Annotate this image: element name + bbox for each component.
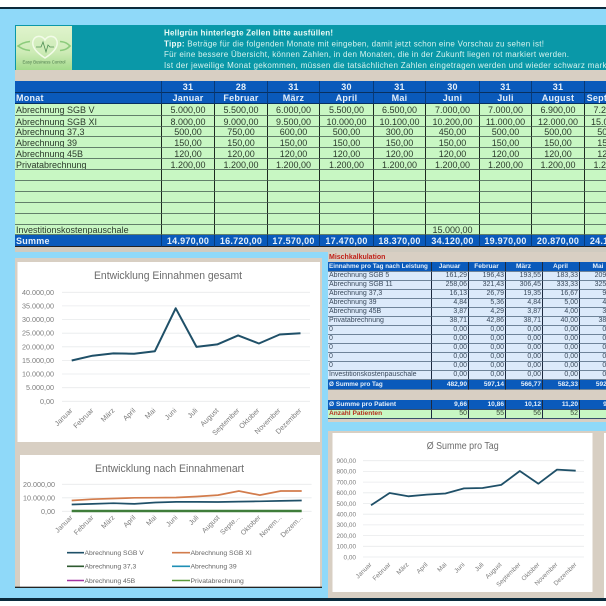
table: Einnahme pro Tag: 566,77: [521, 381, 541, 388]
chart: Summe pro Tag: März: [395, 561, 410, 576]
table: Einnahme pro Tag: 321,43: [483, 281, 504, 288]
main revenue table: 10.200,00: [432, 117, 473, 127]
main revenue table: 10.100,00: [379, 117, 420, 127]
main revenue table: Privatabrechnung: [16, 160, 87, 170]
table: Einnahme pro Tag: April: [553, 263, 568, 270]
chart: Entwicklung Einnahmen gesamt: [15, 258, 322, 450]
main revenue table: 20.870,00: [537, 236, 579, 246]
chart: Entwicklung nach Einnahmenart: 20.000,00: [23, 480, 55, 489]
chart: Entwicklung Einnahmen gesamt: 5.000,00: [26, 383, 54, 392]
table: Einnahme pro Tag: 0,00: [490, 326, 504, 333]
main revenue table: 120,00: [439, 149, 466, 159]
table: Einnahme pro Tag: Mai: [592, 263, 604, 270]
table: Einnahme pro Tag: 0: [329, 326, 333, 333]
main revenue table: 120,00: [174, 149, 202, 159]
chart: Summe pro Tag: 200,00: [336, 533, 356, 540]
table: Summe pro Patient und Anzahl Patienten: Anzahl Patienten: [329, 410, 382, 417]
chart: Summe pro Tag: August: [484, 561, 504, 580]
table: Einnahme pro Tag: 4,84: [453, 299, 467, 306]
table: Summe pro Patient und Anzahl Patienten: [328, 400, 606, 419]
table: Einnahme pro Tag: 306,45: [520, 281, 541, 288]
table: Einnahme pro Tag: März: [516, 263, 531, 270]
chart: Summe pro Tag: Juni: [453, 561, 466, 575]
chart: Entwicklung Einnahmen gesamt: Januar: [53, 406, 75, 428]
chart: Entwicklung nach Einnahmenart: Entwicklung nach Einnahmenart: [95, 463, 244, 475]
chart: Entwicklung nach Einnahmenart: 10.000,00: [23, 493, 55, 502]
main revenue table: 17.470,00: [325, 236, 368, 246]
main revenue table: 14.970,00: [167, 236, 209, 246]
table: Einnahme pro Tag: 0,00: [564, 353, 578, 360]
main revenue table: Abrechnung 39: [16, 138, 77, 148]
main revenue table: 17.570,00: [272, 236, 315, 246]
chart: Summe pro Tag: 0,00: [344, 554, 356, 561]
chart: Entwicklung nach Einnahmenart: Novem...: [259, 514, 283, 539]
table: Einnahme pro Tag: 0,00: [527, 326, 541, 333]
main revenue table: 1.200,00: [435, 160, 470, 170]
table: Einnahme pro Tag: 597,14: [484, 381, 504, 388]
table: Einnahme pro Tag: 0,00: [564, 371, 578, 378]
chart: Entwicklung Einnahmen gesamt: März: [99, 406, 117, 424]
main revenue table: 150,00: [544, 138, 572, 148]
chart: Summe pro Tag: November: [534, 561, 560, 587]
chart: Entwicklung Einnahmen gesamt: 20.000,00: [22, 342, 54, 351]
main revenue table: 150,00: [439, 138, 466, 148]
table: Einnahme pro Tag: 4,29: [490, 308, 504, 315]
main revenue table: 500,00: [333, 127, 360, 137]
chart: Summe pro Tag: April: [415, 561, 429, 575]
table: Einnahme pro Tag: Abrechnung 37,3: [329, 290, 382, 297]
chart: Entwicklung Einnahmen gesamt: Mai: [143, 406, 158, 421]
main revenue table: 7.000,00: [488, 105, 523, 115]
main revenue table: 150,00: [280, 138, 307, 148]
panel: Mischkalkulation background: [328, 252, 606, 422]
chart: Entwicklung Einnahmen gesamt: November: [253, 406, 283, 436]
chart: Entwicklung nach Einnahmenart: Februar: [73, 514, 96, 537]
main revenue table: 6.900,00: [540, 105, 576, 115]
chart legend: [67, 550, 252, 585]
main revenue table: [15, 81, 606, 247]
table: Einnahme pro Tag: Ø Summe pro Tag: [329, 381, 383, 388]
table: Einnahme pro Tag: 0,00: [453, 326, 467, 333]
main revenue table: 1.200,00: [540, 160, 576, 170]
table: Einnahme pro Tag: 0,00: [564, 335, 578, 342]
table: Einnahme pro Tag: 16,13: [449, 290, 467, 297]
table: Einnahme pro Tag: Abrechnung SGB 5: [329, 272, 389, 279]
main revenue table: 6.500,00: [382, 105, 417, 115]
main revenue table: 1.200,00: [223, 160, 259, 170]
main revenue table: 5.000,00: [170, 105, 206, 115]
table: Einnahme pro Tag: 0,00: [564, 326, 578, 333]
main revenue table: 500,00: [174, 127, 202, 137]
chart: Entwicklung Einnahmen gesamt: August: [198, 406, 220, 428]
chart: Summe pro Tag: [328, 431, 606, 598]
chart: Entwicklung nach Einnahmenart: Januar: [54, 514, 75, 535]
main revenue table: 8.000,00: [170, 117, 206, 127]
main revenue table: 31: [183, 82, 193, 92]
main revenue table: Abrechnung SGB V: [16, 105, 95, 115]
chart: Entwicklung Einnahmen gesamt: 35.000,00: [22, 301, 54, 310]
main revenue table: 28: [236, 82, 246, 92]
table: Summe pro Patient und Anzahl Patienten: 11,20: [562, 401, 578, 408]
chart legend: Abrechnung 45B: [84, 578, 136, 585]
main revenue table: 120,00: [333, 149, 360, 159]
table: Einnahme pro Tag: 3,87: [453, 308, 467, 315]
instruction text: [164, 28, 606, 70]
main revenue table: 120,00: [227, 149, 255, 159]
logo: [16, 26, 72, 70]
main revenue table: Abrechnung SGB XI: [16, 117, 97, 127]
table: Einnahme pro Tag: Privatabrechnung: [329, 317, 384, 324]
table: Einnahme pro Tag: 0: [329, 362, 333, 369]
table: Einnahme pro Tag: 0,00: [490, 344, 504, 351]
table: Einnahme pro Tag: Investitionskostenpauschale: [329, 371, 417, 378]
beige band under banner: [15, 70, 606, 81]
chart: Entwicklung Einnahmen gesamt: 10.000,00: [22, 370, 54, 378]
table: Einnahme pro Tag: 482,90: [447, 381, 467, 388]
chart legend: Abrechnung SGB XI: [190, 550, 252, 557]
chart: Entwicklung nach Einnahmenart: August: [201, 514, 221, 535]
table: Einnahme pro Tag: Einnahme pro Tag nach Leistung: [329, 263, 428, 270]
chart: Entwicklung nach Einnahmenart: 0,00: [41, 507, 55, 516]
main revenue table: 19.970,00: [484, 236, 527, 246]
main revenue table: 150,00: [227, 138, 255, 148]
table: Einnahme pro Tag: 0,00: [564, 362, 578, 369]
chart: Summe pro Tag: Oktober: [520, 561, 542, 582]
table: Einnahme pro Tag: 0,00: [453, 344, 467, 351]
main revenue table: 15.000,00: [432, 225, 473, 235]
table: Einnahme pro Tag: 161,29: [446, 272, 467, 279]
table: Einnahme pro Tag: Abrechnung 45B: [329, 308, 381, 315]
chart: Summe pro Tag: Februar: [372, 561, 393, 582]
table: Einnahme pro Tag: 42,86: [486, 317, 504, 324]
table: Einnahme pro Tag: 5,36: [490, 299, 504, 306]
chart: Summe pro Tag: 900,00: [336, 458, 356, 465]
chart: Entwicklung Einnahmen gesamt: Entwicklung Einnahmen gesamt: [94, 270, 242, 282]
main revenue table: Abrechnung 37,3: [16, 127, 85, 137]
chart: Summe pro Tag: 500,00: [336, 501, 356, 508]
main revenue table: 6.000,00: [276, 105, 311, 115]
main revenue table: 9.000,00: [223, 117, 259, 127]
chart legend: Abrechnung 37,3: [84, 564, 136, 571]
table: Einnahme pro Tag: 258,06: [446, 281, 467, 288]
table: Einnahme pro Tag: 0,00: [490, 362, 504, 369]
table: Einnahme pro Tag: 19,35: [523, 290, 541, 297]
table: Einnahme pro Tag: 4,84: [527, 299, 541, 306]
main revenue table: 16.720,00: [220, 236, 262, 246]
main revenue table: Investitionskostenpauschale: [16, 225, 129, 235]
table: Einnahme pro Tag: 0,00: [527, 362, 541, 369]
main revenue table: 12.000,00: [538, 117, 578, 127]
table: Einnahme pro Tag: [328, 262, 606, 390]
instruction text: Hellgrün hinterlegte Zellen bitte ausfüllen!: [164, 28, 333, 38]
chart legend: Abrechnung 39: [190, 564, 237, 571]
logo: Easy Business Control: [22, 60, 66, 64]
chart: Entwicklung nach Einnahmenart: Juli: [188, 514, 201, 527]
chart: Entwicklung Einnahmen gesamt: September: [210, 406, 242, 437]
main revenue table: 120,00: [492, 149, 519, 159]
main revenue table: 9.500,00: [276, 117, 311, 127]
main revenue table: 120,00: [280, 149, 307, 159]
main revenue table: Summe: [16, 236, 50, 246]
table: Einnahme pro Tag: 0,00: [527, 344, 541, 351]
table: Einnahme pro Tag: 40,00: [560, 317, 578, 324]
table: Einnahme pro Tag: 0,00: [453, 335, 467, 342]
table: Einnahme pro Tag: 3,87: [527, 308, 541, 315]
table: Summe pro Patient und Anzahl Patienten: 50: [459, 410, 467, 417]
main revenue table: 5.500,00: [329, 105, 364, 115]
chart: Entwicklung Einnahmen gesamt: 0,00: [40, 397, 54, 406]
chart: Entwicklung Einnahmen gesamt: Oktober: [237, 406, 262, 431]
table: Summe pro Patient und Anzahl Patienten: 9,66: [454, 401, 467, 408]
chart: Entwicklung nach Einnahmenart: Septe...: [219, 514, 241, 536]
chart: Entwicklung nach Einnahmenart: Dezem...: [280, 514, 304, 539]
table: Einnahme pro Tag: 0,00: [453, 371, 467, 378]
table: Einnahme pro Tag: 0: [329, 344, 333, 351]
table: Summe pro Patient und Anzahl Patienten: 52: [570, 410, 578, 417]
chart: Entwicklung nach Einnahmenart: März: [100, 514, 117, 530]
table: Einnahme pro Tag: Januar: [439, 263, 460, 270]
main revenue table: 150,00: [492, 138, 519, 148]
chart: Entwicklung nach Einnahmenart: Oktober: [240, 514, 263, 537]
chart: Entwicklung Einnahmen gesamt: 15.000,00: [22, 356, 54, 365]
table: Einnahme pro Tag: 5,00: [564, 299, 578, 306]
table: Summe pro Patient und Anzahl Patienten: 55: [496, 410, 504, 417]
main revenue table: Juni: [443, 93, 462, 103]
chart: Summe pro Tag: 600,00: [336, 490, 356, 497]
chart: Summe pro Tag: Ø Summe pro Tag: [427, 441, 499, 452]
table: Einnahme pro Tag: 4,00: [564, 308, 578, 315]
table: Einnahme pro Tag: Februar: [474, 263, 499, 270]
main revenue table: 150,00: [386, 138, 413, 148]
main revenue table: 750,00: [227, 127, 255, 137]
chart: Summe pro Tag: Januar: [355, 561, 374, 580]
chart: Summe pro Tag: 100,00: [336, 544, 356, 551]
bottom dark rule: [0, 598, 606, 601]
beige band under table: [15, 247, 606, 252]
main revenue table: 300,00: [386, 127, 413, 137]
table: Einnahme pro Tag: 0,00: [527, 371, 541, 378]
chart legend: Privatabrechnung: [190, 578, 244, 585]
main revenue table: 1.200,00: [382, 160, 417, 170]
Mischkalkulation heading: Mischkalkulation: [329, 254, 385, 261]
table: Einnahme pro Tag: 38,71: [449, 317, 467, 324]
main revenue table: Januar: [172, 93, 204, 103]
chart: Entwicklung nach Einnahmenart: April: [123, 514, 138, 529]
main revenue table: 11.000,00: [486, 117, 525, 127]
main revenue table: April: [336, 93, 357, 103]
main revenue table: März: [283, 93, 304, 103]
chart: Summe pro Tag: 800,00: [336, 469, 356, 476]
main revenue table: 31: [288, 82, 299, 92]
table: Einnahme pro Tag: 333,33: [557, 281, 578, 288]
chart: Summe pro Tag: Dezember: [553, 561, 579, 587]
chart: Summe pro Tag: Juli: [474, 561, 485, 573]
main revenue table: 1.200,00: [170, 160, 206, 170]
chart: Entwicklung Einnahmen gesamt: April: [121, 406, 138, 423]
main revenue table: 150,00: [174, 138, 202, 148]
chart: Entwicklung Einnahmen gesamt: 40.000,00: [22, 288, 54, 297]
main revenue table: August: [542, 93, 574, 103]
main revenue table: 31: [500, 82, 511, 92]
chart: Entwicklung nach Einnahmenart: Mai: [145, 514, 159, 527]
main revenue table: Februar: [223, 93, 259, 103]
main revenue table: 120,00: [544, 149, 572, 159]
instruction text: Für eine bessere Übersicht, können Zahlen, in den Monaten, die in der Zukunft liegen rot markiert werden.: [164, 50, 569, 59]
main revenue table: 7.000,00: [435, 105, 470, 115]
main revenue table: 30: [447, 82, 458, 92]
main revenue table: 5.500,00: [223, 105, 259, 115]
chart: Summe pro Tag: 700,00: [336, 479, 356, 486]
main revenue table: Monat: [16, 93, 44, 103]
main revenue table: 150,00: [333, 138, 360, 148]
table: Einnahme pro Tag: 0,00: [453, 353, 467, 360]
table: Einnahme pro Tag: 582,33: [558, 381, 578, 388]
table: Einnahme pro Tag: 0,00: [490, 353, 504, 360]
main revenue table: 600,00: [280, 127, 307, 137]
chart: Entwicklung nach Einnahmenart: Juni: [165, 514, 180, 528]
table: Summe pro Patient und Anzahl Patienten: 56: [533, 410, 541, 417]
table: Einnahme pro Tag: 0,00: [564, 344, 578, 351]
chart: Summe pro Tag: September: [495, 561, 523, 589]
table: Einnahme pro Tag: 0,00: [490, 371, 504, 378]
main revenue table: 31: [394, 82, 405, 92]
table: Einnahme pro Tag: 0,00: [453, 362, 467, 369]
chart: Summe pro Tag: 400,00: [336, 512, 356, 518]
table: Einnahme pro Tag: 26,79: [486, 290, 504, 297]
main revenue table: 18.370,00: [378, 236, 421, 246]
chart: Entwicklung Einnahmen gesamt: Dezember: [274, 406, 304, 436]
table: Einnahme pro Tag: 0,00: [527, 353, 541, 360]
chart: Entwicklung Einnahmen gesamt: 25.000,00: [22, 329, 54, 338]
table: Summe pro Patient und Anzahl Patienten: 10,86: [487, 401, 504, 408]
main revenue table: Abrechnung 45B: [16, 149, 83, 159]
main revenue table: 1.200,00: [329, 160, 364, 170]
main revenue table: 1.200,00: [488, 160, 523, 170]
chart: Entwicklung Einnahmen gesamt: Juli: [185, 406, 200, 420]
table: Einnahme pro Tag: Abrechnung SGB 11: [329, 281, 393, 288]
table: Einnahme pro Tag: 196,43: [483, 272, 504, 279]
main revenue table: 500,00: [544, 127, 572, 137]
table: Summe pro Patient und Anzahl Patienten: 10,12: [524, 401, 541, 408]
table: Einnahme pro Tag: 193,55: [520, 272, 541, 279]
table: Einnahme pro Tag: Abrechnung 39: [329, 299, 376, 306]
chart: Entwicklung Einnahmen gesamt: 30.000,00: [22, 315, 54, 324]
main revenue table: 30: [341, 82, 352, 92]
table: Einnahme pro Tag: 0,00: [527, 335, 541, 342]
main revenue table: 1.200,00: [276, 160, 311, 170]
chart: Entwicklung nach Einnahmenart: [15, 450, 322, 588]
table: Einnahme pro Tag: 16,67: [560, 290, 578, 297]
chart: Summe pro Tag: Mai: [436, 561, 448, 574]
main revenue table: Mai: [392, 93, 407, 103]
instruction banner: [15, 25, 606, 70]
instruction text: Tipp: Beträge für die folgenden Monate mit eingeben, damit jetzt schon eine Vorschau zu sehen ist!: [164, 40, 544, 48]
table: Einnahme pro Tag: 183,33: [557, 272, 578, 279]
main revenue table: 10.000,00: [326, 117, 367, 127]
table: Einnahme pro Tag: 0: [329, 353, 333, 360]
table: Einnahme pro Tag: 38,71: [523, 317, 541, 324]
main revenue table: 120,00: [386, 149, 413, 159]
main revenue table: 500,00: [492, 127, 519, 137]
table: Summe pro Patient und Anzahl Patienten: Ø Summe pro Patient: [329, 401, 396, 408]
main revenue table: 34.120,00: [431, 236, 474, 246]
main revenue table: 31: [553, 82, 563, 92]
chart: Entwicklung Einnahmen gesamt: Juni: [163, 406, 179, 422]
main revenue table: Juli: [497, 93, 514, 103]
chart: Entwicklung Einnahmen gesamt: Februar: [71, 406, 96, 430]
table: Einnahme pro Tag: 0,00: [490, 335, 504, 342]
chart legend: Abrechnung SGB V: [84, 550, 144, 557]
top dark rule: [0, 7, 606, 9]
chart: Summe pro Tag: 300,00: [336, 522, 356, 529]
main revenue table: 450,00: [439, 127, 466, 137]
table: Einnahme pro Tag: 0: [329, 335, 333, 342]
